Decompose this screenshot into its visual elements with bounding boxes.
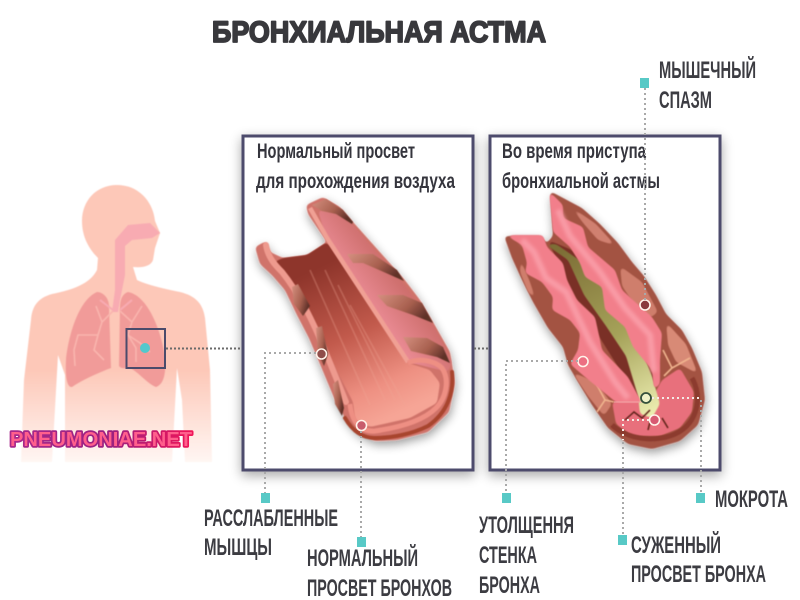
marker: narrowed lumen [650, 415, 660, 425]
callout: thickened wall: УТОЛЩЕННЯ [479, 512, 574, 539]
upper cut edge [310, 208, 408, 362]
cross section [612, 368, 694, 436]
callout: normal lumen: НОРМАЛЬНЫЙ [307, 544, 418, 572]
panel heading: Во время приступа [502, 140, 646, 163]
callout: muscle spasm [640, 56, 756, 300]
teal location dot [140, 343, 150, 353]
lumen fold lines [310, 270, 405, 405]
panel heading: Нормальный просвет [257, 140, 415, 163]
bronchial tree [74, 306, 150, 366]
left wavy wall [505, 235, 642, 403]
panel heading [256, 140, 455, 193]
callout: relaxed muscles: МЫШЦЫ [204, 534, 272, 561]
human figure with lungs [21, 185, 212, 462]
marker: mucus [641, 393, 651, 403]
outer rim [612, 378, 697, 439]
back muscle lobes [520, 206, 698, 416]
dark lumen behind wall [548, 240, 655, 400]
outer wall surface [318, 210, 452, 372]
lower cut edge [266, 245, 346, 402]
location box [126, 329, 165, 368]
watermark: PNEUMONIAE.NET [10, 429, 192, 451]
end rim: light band [350, 360, 446, 431]
illustration: constricted bronchus [504, 191, 705, 449]
callout: thickened wall [479, 361, 578, 599]
callout: narrowed lumen [618, 442, 766, 588]
section edge [614, 401, 645, 403]
panel heading: бронхиальной астмы [502, 170, 660, 193]
marker: relaxed muscle [316, 349, 326, 359]
connector: figure to panels [166, 348, 488, 350]
title: БРОНХИАЛЬНАЯ АСТМА [212, 16, 546, 49]
pale wall centre [522, 210, 654, 398]
marker: muscle spasm [640, 300, 650, 310]
end rim: dark band [345, 372, 452, 438]
airway slit [625, 410, 668, 430]
panel: normal lumen [243, 136, 473, 470]
right wavy wall [549, 191, 662, 390]
callout: thickened wall: БРОНХА [479, 572, 540, 599]
marker: thickened wall [578, 356, 588, 366]
mucus plug [545, 244, 660, 418]
right lung [119, 292, 165, 387]
panel: during attack [490, 136, 720, 470]
upper muscle ridges [312, 199, 450, 363]
body silhouette [21, 185, 212, 462]
callout: muscle spasm: СПАЗМ [659, 87, 712, 114]
callout: relaxed muscles: РАССЛАБЛЕННЫЕ [204, 505, 338, 532]
callout: narrowed lumen: СУЖЕННЫЙ [631, 531, 721, 559]
panel heading [502, 140, 660, 193]
callout: thickened wall: СТЕНКА [479, 542, 537, 569]
callout: normal lumen [307, 431, 452, 600]
inner dotted: mucus and lumen leaders [623, 398, 701, 440]
airway [100, 223, 160, 312]
callout: relaxed muscles [204, 353, 338, 561]
left lung [66, 292, 111, 387]
cream branch lines [597, 350, 690, 412]
lower muscle ridges [292, 284, 344, 416]
inner lumen [274, 242, 440, 427]
illustration: open healthy bronchus [255, 197, 455, 441]
marker: normal lumen [356, 420, 366, 430]
panel heading: для прохождения воздуха [256, 170, 455, 193]
callout: mucus [696, 400, 788, 513]
